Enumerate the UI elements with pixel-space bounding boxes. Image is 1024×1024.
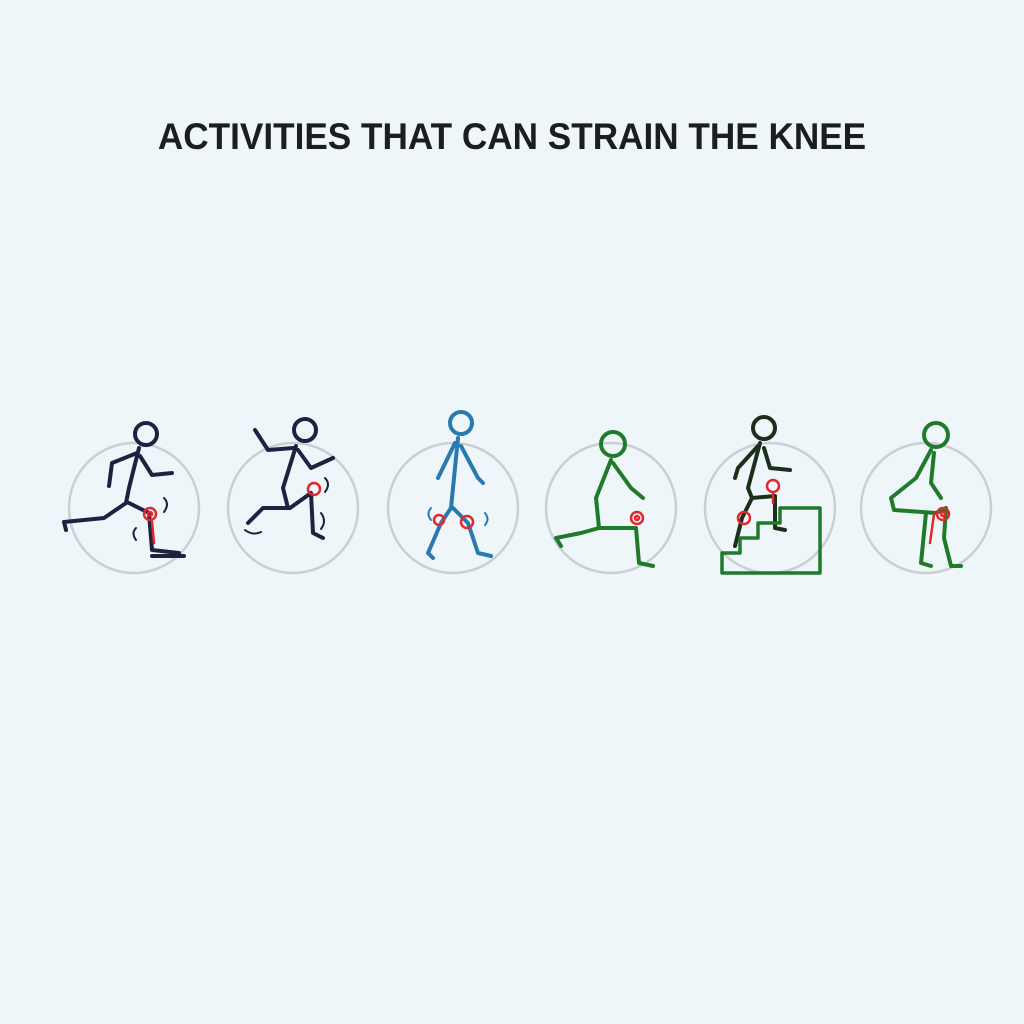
icon: jumping: [228, 419, 358, 573]
icon: walking: [388, 412, 518, 573]
title: ACTIVITIES THAT CAN STRAIN THE KNEE: [158, 116, 866, 157]
icon: climbing stairs: [705, 417, 835, 573]
icon: kneeling: [546, 432, 676, 573]
icon: squatting: [861, 423, 991, 573]
icon: running: [64, 423, 199, 573]
